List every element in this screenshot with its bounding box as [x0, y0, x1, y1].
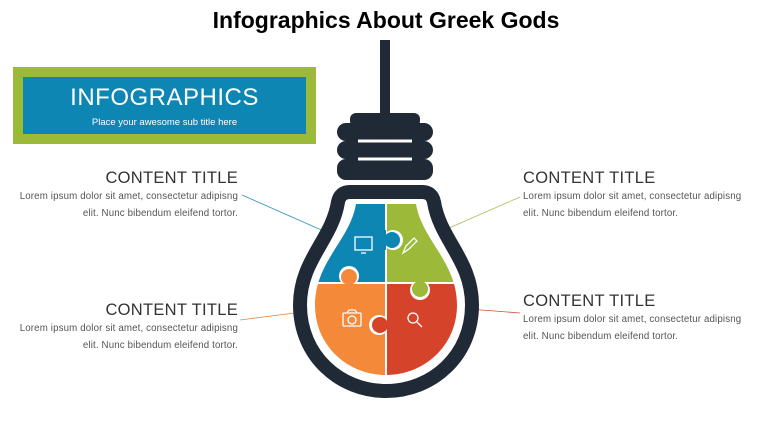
banner inner — [23, 77, 306, 134]
title: Infographics About Greek Gods — [213, 7, 559, 33]
text block: bottom left: Lorem ipsum dolor sit amet, consectetur adipisng — [20, 323, 238, 334]
screw cap — [337, 113, 433, 180]
banner box — [13, 67, 316, 144]
text block: top right: elit. Nunc bibendum eleifend tortor. — [523, 208, 678, 219]
banner inner: Place your awesome sub title here — [92, 117, 237, 128]
puzzle pieces — [315, 204, 457, 375]
icons — [343, 237, 422, 327]
text block: bottom left: CONTENT TITLE — [105, 301, 238, 319]
cord — [380, 40, 390, 120]
bulb outline — [300, 192, 472, 391]
text block: top right: CONTENT TITLE — [523, 169, 656, 187]
text block: bottom right: Lorem ipsum dolor sit amet, consectetur adipisng — [523, 314, 741, 325]
text block: bottom right — [523, 292, 741, 342]
text block: top left: elit. Nunc bibendum eleifend tortor. — [83, 208, 238, 219]
connector lines — [240, 195, 520, 320]
banner inner: INFOGRAPHICS — [70, 84, 259, 111]
text block: bottom left — [20, 301, 238, 351]
bulb graphic — [240, 40, 520, 398]
text block: top left — [20, 169, 238, 219]
text block: bottom right: CONTENT TITLE — [523, 292, 656, 310]
text block: bottom left: elit. Nunc bibendum eleifend tortor. — [83, 340, 238, 351]
text block: top left: Lorem ipsum dolor sit amet, consectetur adipisng — [20, 191, 238, 202]
text block: top right — [523, 169, 741, 219]
text block: bottom right: elit. Nunc bibendum eleifend tortor. — [523, 331, 678, 342]
text block: top left: CONTENT TITLE — [105, 169, 238, 187]
text block: top right: Lorem ipsum dolor sit amet, consectetur adipisng — [523, 191, 741, 202]
